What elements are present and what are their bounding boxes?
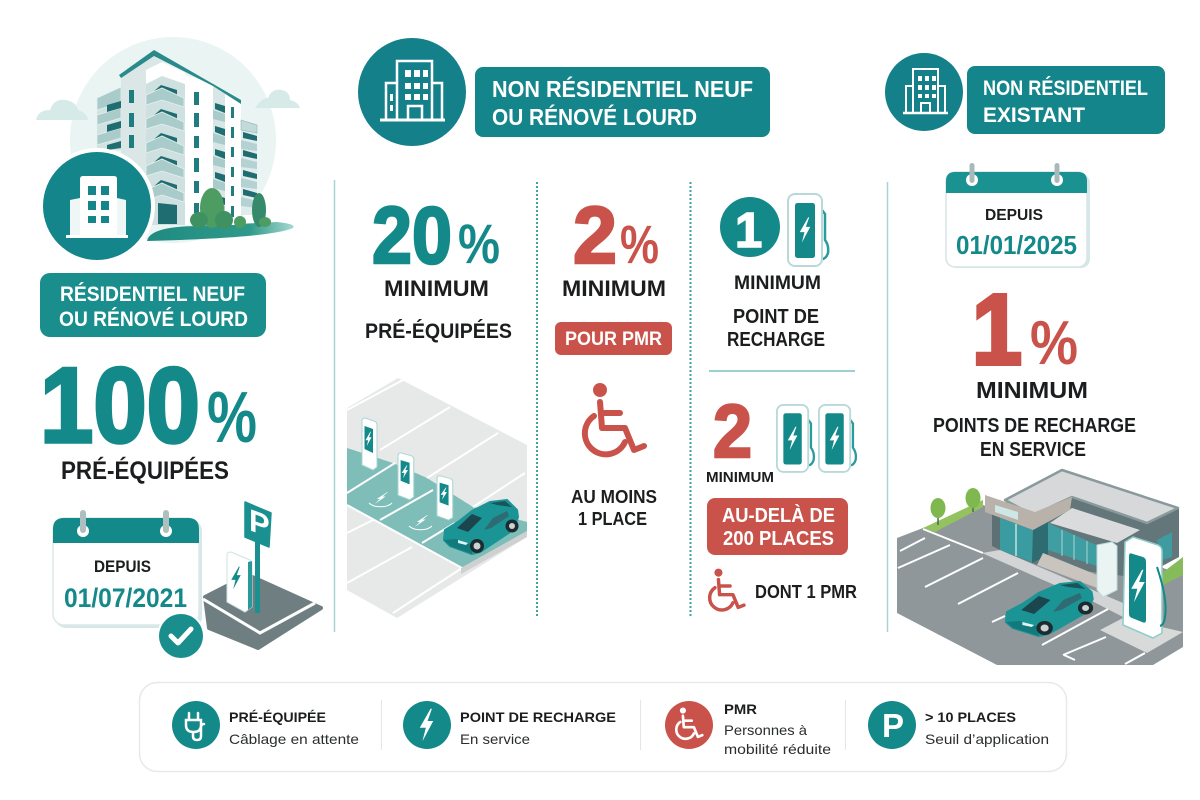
calendar: depuis 01/01/2025: 01/01/2025	[956, 230, 1077, 260]
badge: non résidentiel neuf ou rénové lourd: NON RÉSIDENTIEL NEUF	[492, 75, 753, 102]
stat: 1%: 1	[972, 274, 1022, 386]
stat: 100%: %	[207, 378, 257, 458]
stat: 2 minimum	[706, 389, 774, 486]
legend item: pré-équipée: Câblage en attente	[229, 731, 359, 747]
legend item: pmr: Personnes à	[724, 722, 807, 738]
icon: wheelchair small	[710, 569, 744, 610]
panel: non résidentiel neuf	[347, 38, 857, 618]
calendar: depuis 01/01/2025: DEPUIS	[985, 207, 1043, 224]
legend item: pmr: mobilité réduite	[724, 741, 831, 757]
badge: non résidentiel neuf ou rénové lourd	[475, 67, 770, 137]
badge: au-delà de 200 places: AU-DELÀ DE	[722, 504, 835, 527]
label: au moins 1 place: 1 PLACE	[578, 509, 647, 529]
legend item: point de recharge: En service	[460, 731, 530, 747]
icon: two chargers	[777, 405, 856, 472]
label: dont 1 pmr: DONT 1 PMR	[755, 582, 857, 602]
stat: 2%: 2	[573, 191, 617, 281]
legend item: pré-équipée	[172, 701, 359, 749]
badge: au-delà de 200 places: 200 PLACES	[723, 528, 834, 550]
label: points de recharge en service: EN SERVICE	[980, 439, 1086, 461]
legend item: pmr: PMR	[724, 701, 757, 717]
stat: 1%	[972, 274, 1078, 386]
legend item: plus de 10 places: P	[882, 707, 904, 744]
icon: check mark	[157, 612, 205, 660]
label: minimum point de recharge: RECHARGE	[727, 329, 825, 351]
icon: office building	[358, 38, 466, 146]
legend item: plus de 10 places: > 10 PLACES	[925, 709, 1016, 725]
badge: non résidentiel existant: EXISTANT	[983, 103, 1085, 127]
badge: non résidentiel existant: NON RÉSIDENTIEL	[983, 75, 1148, 100]
legend item: point de recharge	[403, 701, 616, 749]
badge: au-delà de 200 places	[707, 498, 848, 555]
label: minimum point de recharge: MINIMUM	[734, 273, 821, 294]
label: pré-équipées: PRÉ-ÉQUIPÉES	[61, 456, 229, 485]
label: points de recharge en service: POINTS DE RECHARGE	[933, 415, 1136, 437]
legend item: pré-équipée: PRÉ-ÉQUIPÉE	[229, 709, 326, 725]
label: minimum: MINIMUM	[976, 377, 1088, 403]
stat: 2 minimum: 2	[713, 389, 752, 473]
calendar: depuis 01/07/2021: 01/07/2021	[64, 583, 187, 613]
stat: 2 minimum: MINIMUM	[706, 469, 774, 486]
label: points de recharge en service	[933, 415, 1136, 461]
illustration: parking with pre-equipped bays	[347, 378, 527, 618]
stat: 2%: %	[620, 215, 659, 275]
illustration: parking sign and charger	[203, 502, 321, 648]
label: au moins 1 place	[571, 487, 657, 529]
panel: non résidentiel existant	[885, 53, 1183, 665]
legend item: plus de 10 places: Seuil d’application	[925, 731, 1049, 747]
legend item: plus de 10 places	[868, 701, 1049, 749]
legend item: point de recharge: POINT DE RECHARGE	[460, 709, 616, 725]
stat: 20%: 20	[372, 191, 452, 281]
stat: 20%: %	[458, 212, 500, 275]
icon: residential building badge	[39, 148, 155, 264]
stat: 100%: 100	[40, 345, 200, 465]
calendar: depuis 01/07/2021	[53, 510, 202, 628]
label: pré-équipées: PRÉ-ÉQUIPÉES	[365, 320, 512, 343]
badge: pour pmr	[555, 322, 672, 355]
badge: résidentiel neuf ou rénové lourd: OU RÉNOVÉ LOURD	[59, 308, 248, 331]
stat: 2%	[573, 191, 659, 281]
label: minimum point de recharge	[727, 273, 825, 351]
stat: 1 point de recharge	[720, 194, 828, 266]
badge: résidentiel neuf ou rénové lourd: RÉSIDENTIEL NEUF	[60, 283, 245, 306]
illustration: parking sign and charger: P	[249, 502, 270, 544]
icon: office building small	[885, 53, 963, 131]
calendar: depuis 01/07/2021: DEPUIS	[94, 558, 151, 576]
legend	[140, 682, 1066, 772]
label: minimum: MINIMUM	[562, 276, 666, 301]
illustration: residential building	[36, 37, 300, 243]
stat: 1 point de recharge: 1	[735, 204, 762, 258]
badge: non résidentiel neuf ou rénové lourd: OU RÉNOVÉ LOURD	[492, 103, 697, 130]
label: minimum: MINIMUM	[384, 276, 489, 301]
legend item: pmr	[665, 701, 831, 757]
label: minimum point de recharge: POINT DE	[733, 306, 819, 328]
illustration: commercial building with charger	[897, 470, 1183, 665]
calendar: depuis 01/01/2025	[946, 163, 1090, 268]
badge: non résidentiel existant	[967, 66, 1165, 134]
icon: wheelchair	[585, 383, 644, 454]
panel: résidentiel neuf	[36, 37, 321, 660]
badge: résidentiel neuf ou rénové lourd	[40, 273, 266, 337]
label: au moins 1 place: AU MOINS	[571, 487, 657, 507]
stat: 1%: %	[1030, 309, 1078, 378]
badge: pour pmr: POUR PMR	[565, 329, 662, 350]
